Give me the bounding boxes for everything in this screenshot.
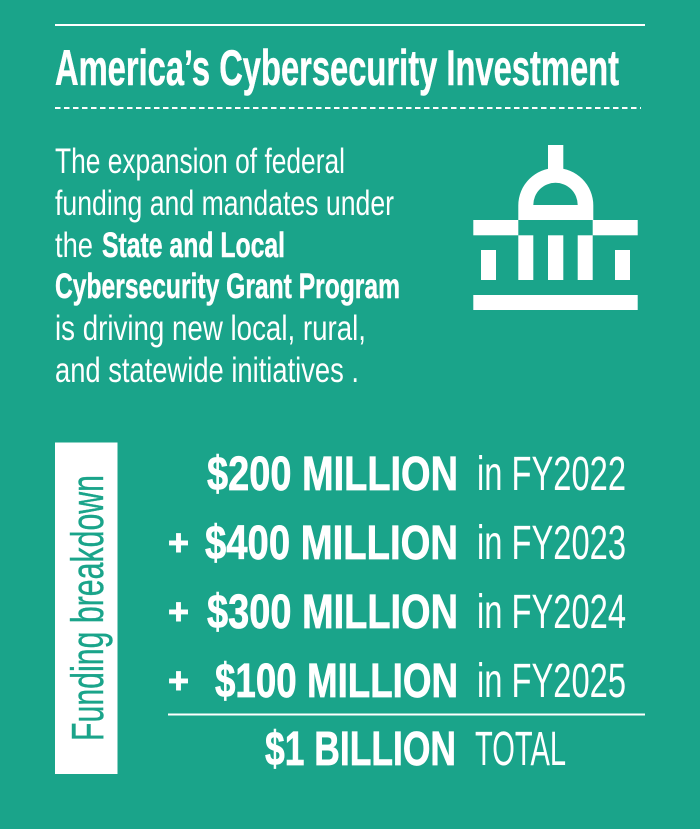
funding row: FY2025: + — [168, 660, 189, 701]
funding row: FY2025: in FY2025 — [477, 655, 626, 708]
funding row: FY2024: $300 MILLION — [207, 586, 458, 639]
funding total: TOTAL — [475, 723, 566, 776]
intro text block: the — [55, 226, 93, 265]
funding row: FY2024: in FY2024 — [477, 586, 626, 639]
panel: funding breakdown label: Funding breakdown — [62, 475, 113, 741]
icon: capitol building — [473, 145, 638, 310]
intro text block: is driving new local, rural, — [55, 309, 366, 348]
funding row: FY2023: + — [168, 522, 189, 563]
funding row: FY2025 — [168, 655, 626, 708]
intro text block: and statewide initiatives . — [55, 351, 359, 390]
funding row: FY2023: in FY2023 — [477, 517, 626, 570]
intro text block — [55, 142, 400, 390]
panel: funding breakdown label — [55, 442, 118, 774]
funding row: FY2024 — [168, 586, 626, 639]
funding row: FY2024: + — [168, 591, 189, 632]
intro text block: State and Local — [102, 226, 285, 265]
funding total: $1 BILLION — [265, 723, 456, 776]
intro text block: The expansion of federal — [55, 142, 345, 181]
intro text block: funding and mandates under — [55, 184, 394, 223]
funding row: FY2022: $200 MILLION — [207, 448, 458, 501]
funding row: FY2022: in FY2022 — [477, 448, 626, 501]
intro text block: Cybersecurity Grant Program — [55, 267, 400, 306]
funding row: FY2023: $400 MILLION — [205, 517, 458, 570]
funding row: FY2023 — [168, 517, 626, 570]
funding row: FY2025: $100 MILLION — [215, 655, 458, 708]
